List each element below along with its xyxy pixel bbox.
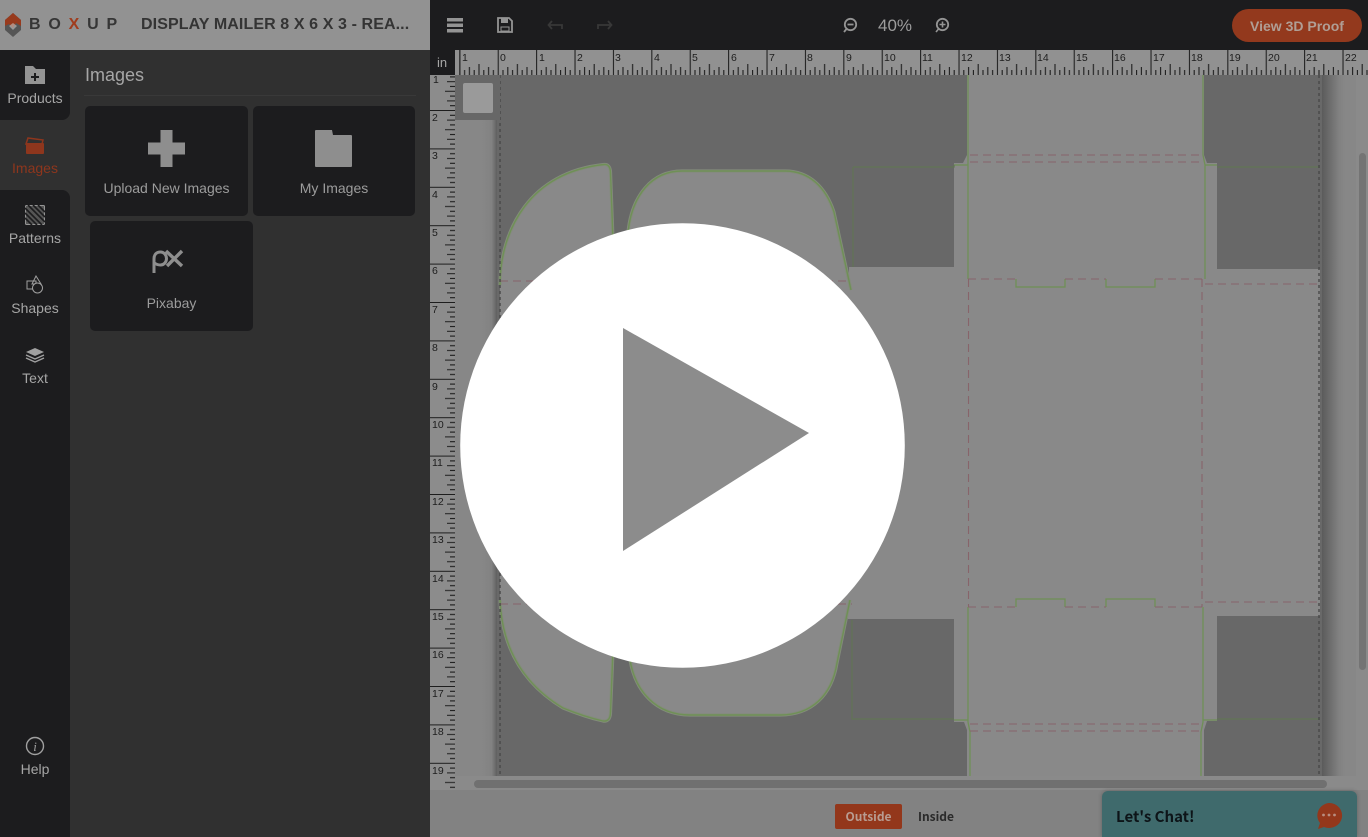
icon: photos	[25, 137, 44, 154]
top toolbar	[430, 0, 1368, 50]
top ruler: 15	[1076, 52, 1088, 64]
side navigation	[0, 50, 70, 837]
icon: zoom out	[843, 18, 858, 32]
horizontal scrollbar	[455, 776, 1368, 790]
left ruler: 9	[432, 381, 438, 393]
top ruler: 11	[922, 52, 933, 64]
printable canvas	[497, 75, 1322, 776]
vertical scrollbar	[1356, 75, 1368, 776]
left ruler: 14	[432, 573, 444, 585]
outside tab	[835, 804, 902, 829]
red fold lines	[500, 155, 1320, 731]
top ruler: 16	[1114, 52, 1126, 64]
video play button	[460, 223, 905, 668]
top ruler: 7	[769, 52, 775, 64]
canvas edge dotted guides	[500, 75, 1319, 776]
top ruler: 0	[500, 52, 506, 64]
left ruler: 8	[432, 342, 438, 354]
outside tab: Outside	[845, 808, 892, 825]
flap: lower left	[500, 600, 613, 721]
top ruler: 1	[462, 52, 468, 64]
icon: pixabay px	[152, 250, 184, 273]
label: Products	[7, 90, 63, 106]
icon: layers	[26, 348, 44, 363]
play triangle	[623, 328, 809, 551]
nav tab: images active	[12, 137, 58, 176]
top ruler: 9	[846, 52, 852, 64]
top ruler: 6	[731, 52, 737, 64]
nav tabs: lower group	[0, 190, 70, 837]
green cut lines	[954, 75, 1217, 776]
logo wordmark: BOXUP	[29, 16, 125, 33]
nav tab: products	[0, 50, 70, 120]
play circle	[460, 223, 905, 668]
flap: lower centre	[630, 600, 850, 715]
top ruler: 2	[577, 52, 583, 64]
faint green panel outlines	[852, 165, 1320, 719]
label: Images	[12, 160, 58, 176]
left ruler: 19	[432, 765, 444, 777]
top ruler: 17	[1153, 52, 1165, 64]
button: view 3D proof	[1232, 9, 1362, 42]
main body panel	[500, 75, 1320, 776]
main stage: rulers, dieline and canvas	[430, 50, 1368, 790]
top ruler: 13	[999, 52, 1011, 64]
tools panel background	[70, 50, 430, 837]
left ruler: 16	[432, 649, 444, 661]
icon: plus	[148, 130, 185, 167]
ruler unit box: in	[437, 55, 447, 70]
flap: upper centre	[628, 171, 851, 300]
ruler unit box	[430, 50, 455, 75]
top ruler: 5	[692, 52, 698, 64]
flap: upper left	[500, 164, 613, 300]
top ruler: 22	[1345, 52, 1357, 64]
top ruler: 1	[539, 52, 545, 64]
left ruler: 6	[432, 265, 438, 277]
bottom bar	[430, 790, 1368, 837]
left ruler: 4	[432, 189, 438, 201]
box dieline panels	[500, 75, 1320, 776]
left ruler: 17	[432, 688, 444, 700]
icon: patterns	[25, 205, 45, 225]
logo mark	[5, 13, 21, 37]
label: Upload New Images	[103, 180, 230, 196]
left ruler	[430, 74, 455, 790]
stage background	[430, 50, 1368, 837]
top ruler: 18	[1191, 52, 1203, 64]
top ruler: 19	[1229, 52, 1241, 64]
right canvas shadow	[1321, 75, 1345, 776]
icon: folder	[315, 130, 352, 167]
left ruler: 15	[432, 611, 444, 623]
left ruler: 3	[432, 150, 438, 162]
chat widget	[1102, 791, 1357, 837]
top ruler: 3	[615, 52, 621, 64]
card: my images	[253, 106, 415, 216]
header bar with logo and title	[0, 0, 430, 50]
icon: zoom in	[936, 18, 950, 32]
label: Pixabay	[147, 295, 196, 311]
top ruler: 20	[1268, 52, 1280, 64]
top ruler: 8	[807, 52, 813, 64]
icon: shapes	[26, 275, 43, 294]
icon: chat bubble	[1317, 803, 1342, 829]
card: pixabay	[90, 221, 253, 331]
left ruler: 2	[432, 112, 438, 124]
chat label: Let's Chat!	[1116, 806, 1195, 827]
panel heading: Images	[85, 65, 144, 85]
zoom level: 40%	[878, 16, 912, 35]
icon: folder plus	[25, 66, 45, 84]
label: My Images	[300, 180, 368, 196]
top ruler: 4	[654, 52, 660, 64]
icon: save	[497, 17, 513, 33]
icon: redo	[597, 20, 612, 30]
inside tab: Inside	[918, 808, 954, 825]
left ruler: 13	[432, 534, 444, 546]
left ruler: 7	[432, 304, 438, 316]
icon: help	[26, 736, 44, 756]
top ruler	[455, 50, 1368, 75]
label: Shapes	[11, 300, 59, 316]
label: Patterns	[9, 230, 61, 246]
card: upload new images	[85, 106, 248, 216]
label: Help	[21, 761, 49, 777]
icon: undo	[548, 20, 563, 30]
top ruler: 21	[1306, 52, 1318, 64]
button: view 3D proof: View 3D Proof	[1250, 18, 1344, 34]
left ruler: 1	[433, 74, 439, 86]
left ruler: 12	[432, 496, 444, 508]
label: Text	[22, 370, 48, 386]
left ruler: 10	[432, 419, 444, 431]
left ruler: 5	[432, 227, 438, 239]
selection tool	[455, 75, 500, 120]
top ruler: 12	[961, 52, 973, 64]
left ruler: 18	[432, 726, 444, 738]
left canvas shadow	[482, 75, 498, 776]
project title: DISPLAY MAILER 8 X 6 X 3 - REA...	[141, 16, 409, 33]
top ruler: 10	[884, 52, 896, 64]
top ruler: 14	[1037, 52, 1049, 64]
icon: help: i	[33, 739, 37, 754]
icon: menu	[447, 18, 463, 32]
left ruler: 11	[432, 457, 443, 469]
